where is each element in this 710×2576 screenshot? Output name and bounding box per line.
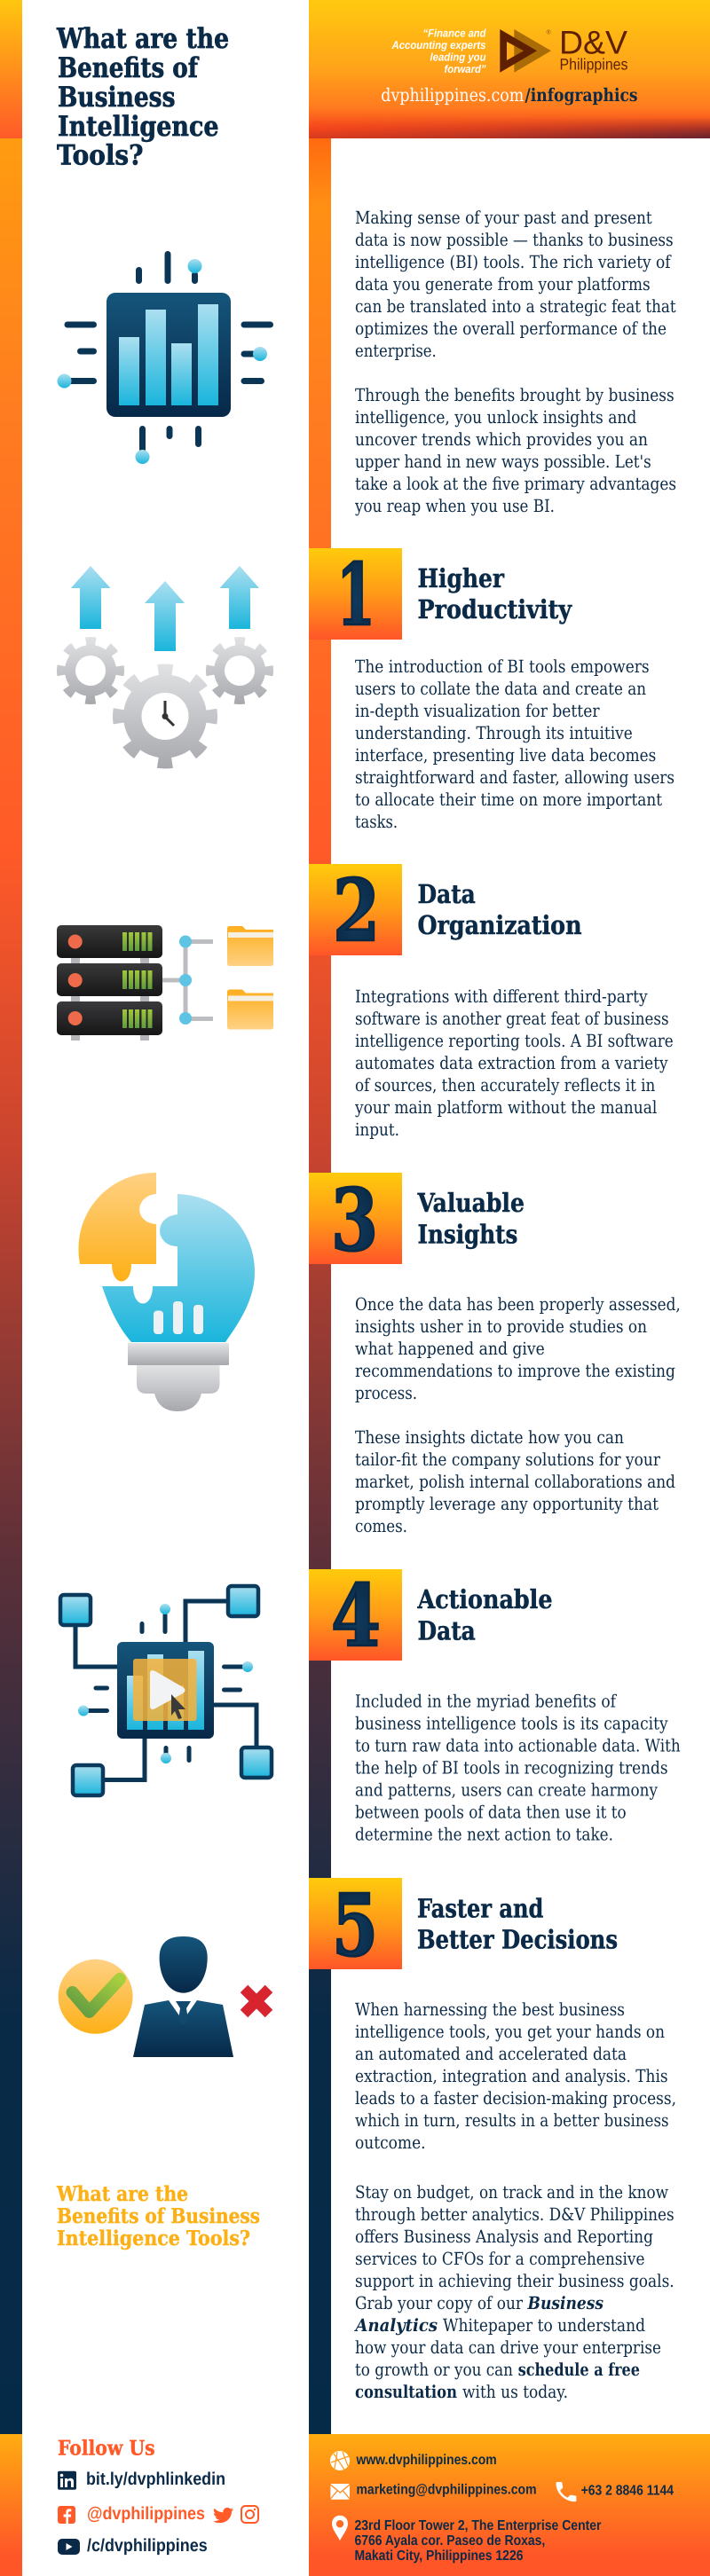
text: section 3: insights usher in to provide studies on (355, 1316, 647, 1337)
intro text: data you generate from your platforms (355, 274, 651, 295)
number badge 4 (309, 1566, 402, 1666)
text: section 5: how your data can drive your enterprise (355, 2337, 661, 2358)
heading: Actionable Data: Data (417, 1616, 476, 1646)
text: section 5: an automated and accelerated data (355, 2044, 627, 2064)
contact: website: www.dvphilippines.com (356, 2453, 497, 2468)
icon: gears with clock and arrows (61, 566, 269, 763)
text: section 2: software is another great feat of business (355, 1009, 669, 1029)
closing question: What are the (56, 2182, 188, 2206)
tagline (391, 27, 486, 75)
title: Tools? (57, 140, 144, 172)
logo: D&V Philippines: ® (547, 30, 552, 35)
text: section 5 (354, 1999, 676, 2402)
text: section 5: Analytics (354, 2315, 438, 2336)
text: section 2: Integrations with different third-party (355, 986, 648, 1007)
contact: phone: +63 2 8846 1144 (581, 2483, 674, 2498)
heading: Valuable Insights: Insights (417, 1219, 517, 1249)
text: section 3: These insights dictate how you can (355, 1427, 624, 1448)
heading: Faster and Better Decisions (417, 1893, 618, 1955)
number badge 4: 4 (331, 1566, 381, 1666)
text: section 1: tasks. (355, 812, 398, 832)
intro text: upper hand in new ways possible. Let's (355, 452, 651, 472)
text: section 1 (355, 656, 674, 832)
text: section 4: determine the next action to take. (355, 1824, 613, 1845)
contact: email: marketing@dvphilippines.com (357, 2483, 536, 2498)
heading: Data Organization: Data (417, 879, 476, 909)
text: section 4: the help of BI tools in recognizing trends (355, 1758, 668, 1778)
icon: person with check and cross (59, 1936, 269, 2057)
social: youtube: /c/dvphilippines (87, 2536, 208, 2556)
tagline: “Finance and (422, 27, 486, 39)
intro text: uncover trends which provides you an (355, 429, 648, 450)
intro text: enterprise. (355, 341, 437, 361)
text: section 2: automates data extraction from a variety (355, 1053, 668, 1073)
text: section 3: promptly leverage any opportunity that (355, 1494, 659, 1514)
tagline: Accounting experts (391, 39, 486, 51)
text: section 5: Stay on budget, on track and in the know (355, 2182, 668, 2203)
closing question: Benefits of Business (57, 2204, 260, 2228)
heading: Valuable Insights: Valuable (417, 1188, 525, 1218)
intro text: optimizes the overall performance of the (355, 318, 667, 339)
website url (381, 84, 637, 106)
text: section 2: input. (355, 1119, 399, 1140)
heading: Valuable Insights (417, 1188, 525, 1249)
closing question (56, 2182, 260, 2250)
text: section 4: business intelligence tools is its capacity (355, 1714, 668, 1733)
tagline: leading you (430, 51, 486, 64)
intro text (354, 208, 676, 516)
number badge 5: 5 (332, 1875, 378, 1975)
text: section 1: interface, presenting live data becomes (355, 745, 656, 766)
text: section 3: recommendations to improve the existing (355, 1361, 675, 1381)
heading: Faster and Better Decisions: Better Decisions (417, 1925, 618, 1955)
tagline: forward” (444, 63, 486, 75)
number badge 3: 3 (331, 1170, 378, 1270)
text: section 5: offers Business Analysis and Reporting (355, 2227, 653, 2247)
icon: puzzle light bulb (78, 1173, 255, 1411)
contact: address: 23rd Floor Tower 2, The Enterprise Center (355, 2518, 602, 2533)
text: section 3: tailor-fit the company solutions for your (355, 1449, 661, 1470)
logo: D&V Philippines (500, 25, 628, 74)
text: section 5: Business (527, 2293, 604, 2313)
contact: website (330, 2451, 497, 2470)
contact: address: 6766 Ayala cor. Paseo de Roxas, (355, 2533, 545, 2549)
icon: data chip with play button and nodes (60, 1586, 272, 1795)
title: What are the (56, 23, 229, 55)
logo: D&V Philippines: D&V (559, 25, 627, 61)
text: section 4: between pools of data then use it to (355, 1802, 627, 1822)
text: section 5: Whitepaper to understand (443, 2315, 645, 2336)
contact: phone (556, 2482, 674, 2501)
text: section 2 (354, 986, 674, 1140)
text: section 5: services to CFOs for a comprehensive (355, 2249, 644, 2269)
intro text: intelligence (BI) tools. The rich variety of (355, 252, 672, 272)
text: section 5: extraction, integration and analysis. This (355, 2066, 668, 2086)
heading: Data Organization: Organization (417, 910, 582, 940)
number badge 5 (309, 1875, 402, 1975)
text: section 5: to growth or you can (355, 2360, 513, 2380)
text: section 5: When harnessing the best business (355, 1999, 625, 2020)
text: section 5: with us today. (462, 2382, 568, 2402)
heading: Higher Productivity: Productivity (417, 594, 572, 624)
text: section 3: process. (355, 1383, 417, 1403)
text: section 2: your main platform without the manual (354, 1097, 657, 1118)
text: section 3: what happened and give (355, 1339, 545, 1359)
text: section 2: of sources, then accurately reflects it in (355, 1075, 656, 1096)
heading: Faster and Better Decisions: Faster and (417, 1893, 543, 1923)
follow us heading: Follow Us (58, 2436, 154, 2461)
text: section 4 (355, 1691, 681, 1845)
title: Benefits of (58, 52, 199, 84)
website url: dvphilippines.com (381, 84, 524, 106)
text: section 5: consultation (355, 2382, 457, 2402)
title: Intelligence (58, 111, 218, 143)
heading: Data Organization (417, 879, 582, 940)
number badge 3 (309, 1170, 402, 1270)
text: section 1: in-depth visualization for better (355, 701, 600, 721)
icon: chip with bar chart (57, 251, 273, 464)
number badge 1 (309, 545, 402, 645)
closing question: Intelligence Tools? (57, 2227, 250, 2250)
text: section 1: users to collate the data and create an (355, 679, 646, 699)
title (56, 23, 229, 172)
number badge 2 (309, 860, 402, 961)
text: section 5: intelligence tools, you get your hands on (355, 2022, 665, 2042)
social: facebook, twitter, instagram: @dvphilippines (87, 2504, 205, 2524)
icon: server rack and folders (57, 925, 273, 1041)
social: facebook, twitter, instagram (58, 2504, 258, 2524)
contact: address (332, 2516, 602, 2564)
social: linkedin: bit.ly/dvphlinkedin (86, 2470, 225, 2489)
footer bars (0, 2434, 710, 2576)
text: section 4: Included in the myriad benefits of (355, 1691, 618, 1712)
text: section 3 (355, 1294, 681, 1536)
contact: address: Makati City, Philippines 1226 (355, 2549, 524, 2564)
text: section 1: to allocate their time on more important (355, 789, 662, 810)
logo: D&V Philippines: Philippines (559, 56, 628, 74)
heading: Higher Productivity (417, 563, 572, 624)
text: section 1: The introduction of BI tools empowers (355, 656, 650, 677)
text: section 5: outcome. (355, 2132, 426, 2153)
number badge 1: 1 (336, 545, 375, 645)
intro text: you reap when you use BI. (354, 496, 555, 516)
text: section 1: understanding. Through its intuitive (355, 723, 633, 743)
text: section 4: and patterns, users can create harmony (355, 1779, 658, 1801)
heading: Actionable Data (417, 1584, 552, 1646)
intro text: intelligence, you unlock insights and (355, 407, 636, 428)
title: Business (58, 82, 176, 114)
intro text: Making sense of your past and present (355, 208, 652, 228)
heading: Higher Productivity: Higher (417, 563, 505, 593)
text: section 5: schedule a free (518, 2360, 640, 2380)
text: section 5: Grab your copy of our (355, 2293, 524, 2313)
header banner (309, 0, 710, 138)
text: section 3: comes. (355, 1516, 407, 1536)
heading: Actionable Data: Actionable (417, 1584, 552, 1614)
number badge 2: 2 (333, 860, 380, 961)
website url: /infographics (525, 84, 637, 106)
